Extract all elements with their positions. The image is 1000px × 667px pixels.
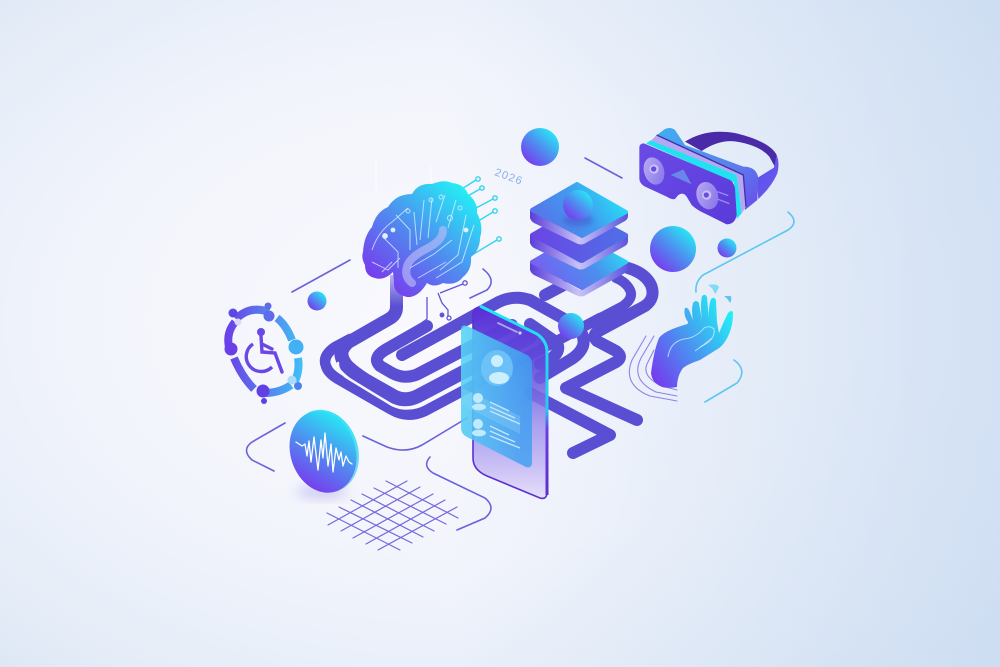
coin rim xyxy=(281,401,369,501)
sphere: large right xyxy=(650,226,696,272)
brain silhouette xyxy=(362,181,481,297)
floating fragment one xyxy=(708,284,719,294)
nose triangle xyxy=(671,169,692,184)
VR headset xyxy=(639,128,779,224)
ring nodes xyxy=(224,302,304,404)
stack of layers xyxy=(530,184,628,296)
coin face xyxy=(279,402,367,502)
sphere on the stack xyxy=(563,190,593,220)
zigzag one xyxy=(566,332,637,420)
brain circuit leads xyxy=(457,177,501,258)
wheelchair figure xyxy=(246,328,282,372)
sphere: small right xyxy=(718,238,736,258)
glass card xyxy=(461,326,532,467)
phone xyxy=(461,306,547,498)
loop right of phone xyxy=(530,324,558,364)
motion lines xyxy=(629,336,677,401)
lavender strip xyxy=(651,136,746,213)
sphere shadow on the stack xyxy=(563,214,593,226)
top arm from the brain stem xyxy=(342,296,396,346)
strap front xyxy=(757,155,779,199)
top layer xyxy=(530,184,628,244)
wheelchair accessibility ring xyxy=(224,302,304,404)
bottom layer xyxy=(530,236,628,296)
phone body xyxy=(473,307,547,498)
zigzag two xyxy=(530,393,610,453)
list row two xyxy=(472,419,520,448)
front face xyxy=(639,143,737,224)
stub under the stack xyxy=(545,286,562,295)
list row one xyxy=(462,388,520,434)
cyan edge xyxy=(480,306,547,495)
speaker xyxy=(498,323,517,332)
ring segments xyxy=(228,310,299,393)
sound wave coin xyxy=(279,401,369,502)
strap back xyxy=(685,132,777,168)
sphere: on the maze xyxy=(558,313,584,339)
waveform xyxy=(296,433,352,472)
lower circuit traces xyxy=(392,281,467,337)
dark seam xyxy=(657,135,746,207)
sparkle lines xyxy=(376,160,431,192)
decorative connector lines xyxy=(246,158,794,530)
arc under the stack, inner xyxy=(583,278,631,327)
white split between outer and second path xyxy=(338,363,420,408)
outer path xyxy=(325,318,600,415)
U-shaped path xyxy=(377,325,512,377)
inner spiral path with end cap xyxy=(402,298,584,378)
brain xyxy=(362,160,481,297)
second path xyxy=(341,337,530,399)
middle layer xyxy=(530,209,628,270)
sphere: small left xyxy=(308,292,326,310)
brain stem xyxy=(390,275,403,306)
cyan strip xyxy=(646,140,742,219)
brain fold xyxy=(406,230,443,283)
maze of circuit paths xyxy=(325,268,653,453)
year label: 2026 xyxy=(493,167,525,188)
palm lines xyxy=(668,327,714,357)
isometric grid xyxy=(327,481,458,550)
hand xyxy=(629,284,733,401)
brain traces xyxy=(372,195,474,278)
right lens xyxy=(693,179,729,212)
profile avatar xyxy=(481,350,513,386)
coin shadow xyxy=(296,486,348,498)
left lens xyxy=(640,155,668,187)
hand silhouette xyxy=(651,295,733,388)
speaker dot xyxy=(518,331,522,335)
housing top xyxy=(656,128,758,210)
floating fragment two xyxy=(724,296,731,303)
arc under the stack, outer xyxy=(597,268,653,332)
sphere: top xyxy=(521,128,559,166)
